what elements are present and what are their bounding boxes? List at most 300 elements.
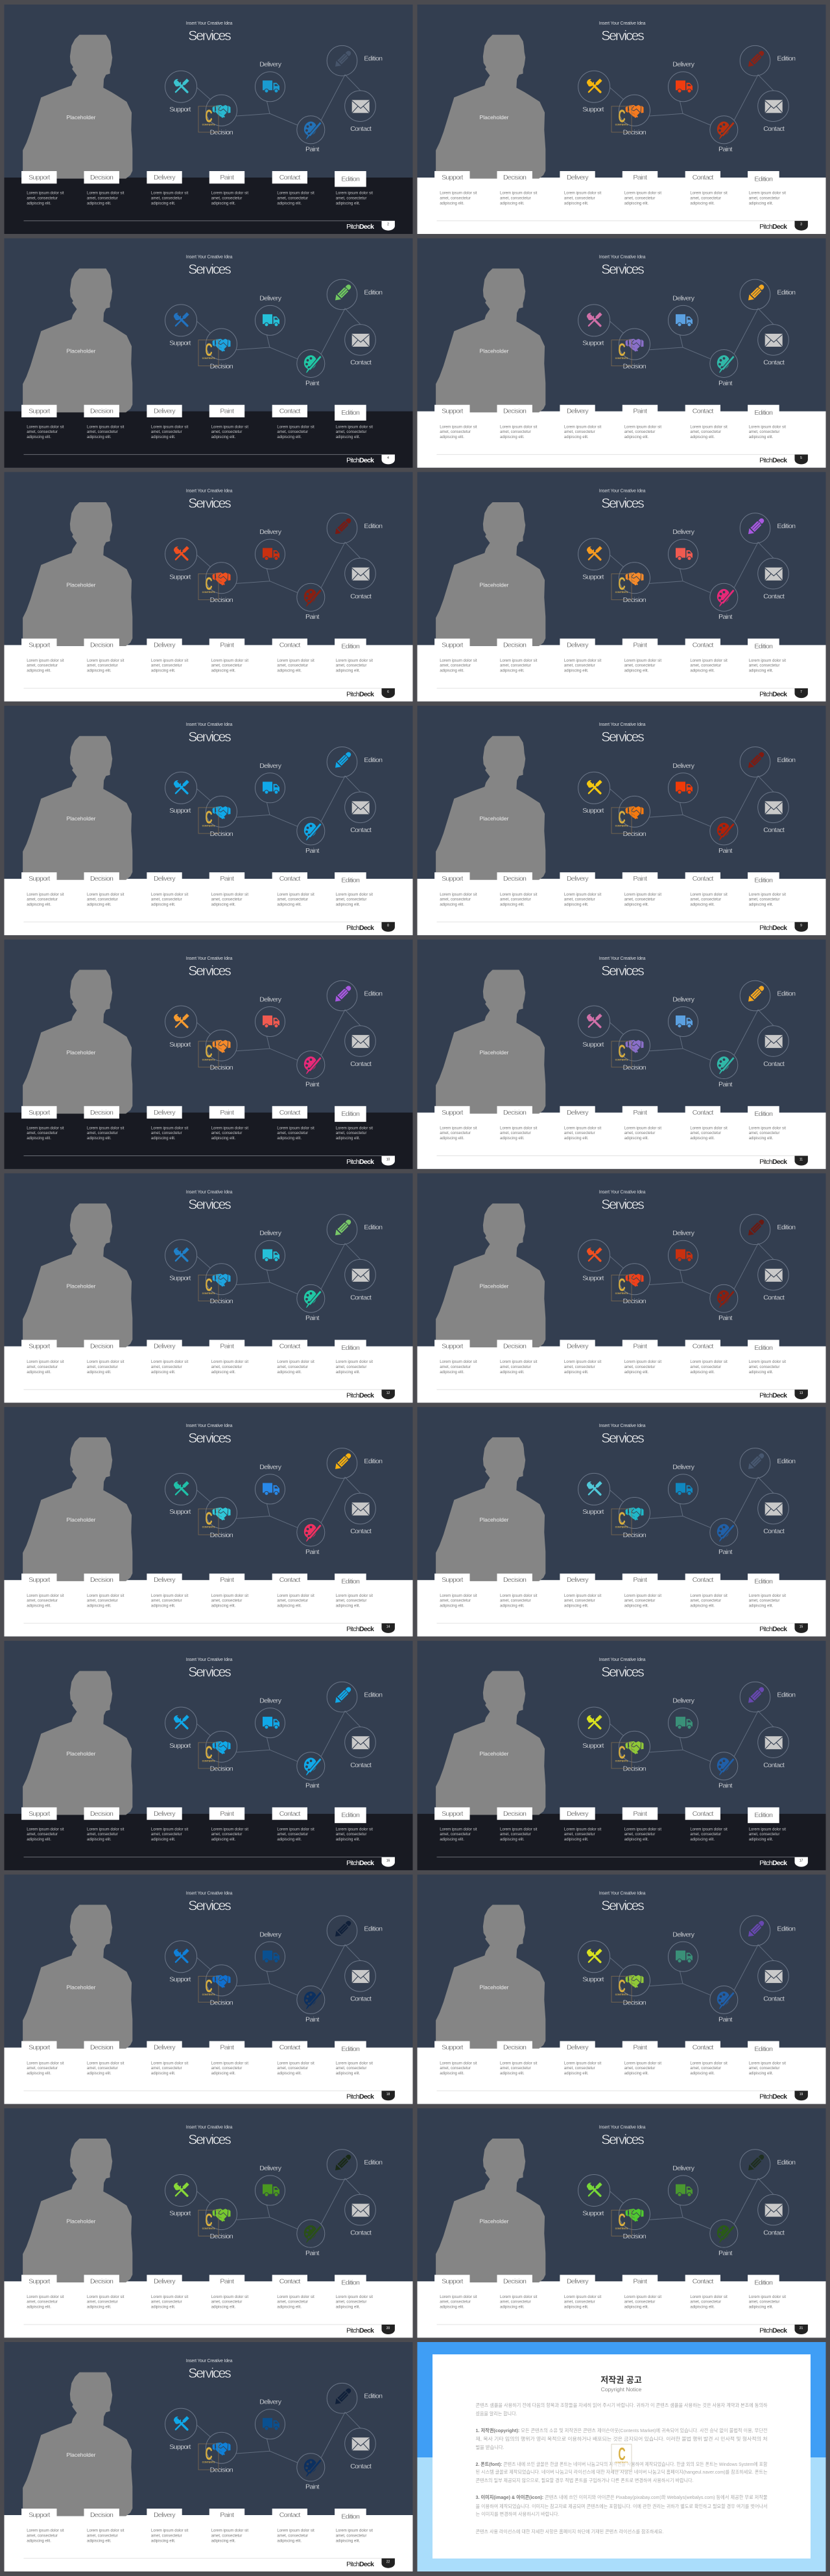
- logo badge: C: [205, 2444, 213, 2464]
- logo badge: C: [618, 1976, 626, 1996]
- node: Paint: Paint: [305, 2249, 320, 2257]
- descriptions: Lorem ipsum dolor sit: [749, 2295, 786, 2299]
- title: [186, 2359, 233, 2381]
- descriptions: amet, consectetur: [500, 2301, 531, 2304]
- node: Contact: Contact: [763, 1995, 785, 2003]
- descriptions: adipiscing elit.: [211, 435, 236, 439]
- logo badge: C: [205, 106, 213, 126]
- logo badge: [198, 807, 219, 833]
- descriptions: adipiscing elit.: [440, 2072, 464, 2076]
- descriptions: adipiscing elit.: [87, 2539, 112, 2543]
- descriptions: adipiscing elit.: [690, 1137, 715, 1141]
- descriptions: amet, consectetur: [500, 1131, 531, 1135]
- title: [599, 723, 646, 745]
- descriptions: Lorem ipsum dolor sit: [564, 192, 602, 196]
- node: Edition: [335, 53, 383, 67]
- descriptions: adipiscing elit.: [749, 2072, 774, 2076]
- descriptions: amet, consectetur: [440, 1131, 471, 1135]
- descriptions: amet, consectetur: [564, 898, 595, 901]
- descriptions: amet, consectetur: [277, 430, 308, 434]
- footer brand: 12: [386, 1391, 390, 1395]
- tabs: Edition: [754, 643, 773, 651]
- node: Support: Support: [169, 2209, 191, 2217]
- footer brand: PitchDeck: [759, 1158, 787, 1166]
- descriptions: Lorem ipsum dolor sit: [500, 425, 538, 429]
- descriptions: amet, consectetur: [211, 1131, 242, 1135]
- title: [186, 723, 233, 745]
- tabs: Edition: [754, 2045, 773, 2053]
- node: Contact: Contact: [763, 1761, 785, 1769]
- descriptions: [440, 659, 786, 673]
- node: Paint: [715, 587, 734, 621]
- descriptions: adipiscing elit.: [440, 2306, 464, 2310]
- node: Delivery: [259, 1931, 282, 1963]
- tabs: Contact: [693, 2044, 713, 2052]
- tabs: Delivery: [567, 1810, 589, 1818]
- descriptions: amet, consectetur: [211, 2067, 242, 2071]
- tabs: Paint: [220, 408, 234, 415]
- title: Insert Your Creative Idea: [599, 255, 646, 260]
- node: Delivery: Delivery: [672, 1697, 695, 1705]
- descriptions: adipiscing elit.: [749, 1604, 774, 1608]
- descriptions: Lorem ipsum dolor sit: [564, 893, 602, 897]
- tabs: Support: [442, 408, 463, 415]
- logo badge: CONTENTS: [615, 1058, 628, 1061]
- descriptions: Lorem ipsum dolor sit: [151, 659, 189, 663]
- title: Services: [601, 496, 644, 511]
- node: Delivery: [259, 528, 282, 561]
- title: Services: [601, 1899, 644, 1914]
- descriptions: Lorem ipsum dolor sit: [440, 1127, 477, 1131]
- node: Delivery: Delivery: [672, 61, 695, 69]
- node: Delivery: [672, 1229, 695, 1262]
- descriptions: amet, consectetur: [27, 1365, 58, 1369]
- descriptions: [27, 1594, 373, 1608]
- descriptions: amet, consectetur: [27, 898, 58, 901]
- node: Edition: [748, 286, 796, 300]
- placeholder label: Placeholder: [67, 1283, 96, 1290]
- node: Contact: Contact: [350, 1995, 372, 2003]
- descriptions: Lorem ipsum dolor sit: [624, 1127, 661, 1131]
- node: Edition: Edition: [364, 522, 383, 530]
- node: Edition: [335, 988, 383, 1002]
- tabs: Decision: [90, 2044, 113, 2052]
- descriptions: amet, consectetur: [211, 664, 242, 668]
- descriptions: Lorem ipsum dolor sit: [690, 1127, 728, 1131]
- descriptions: Lorem ipsum dolor sit: [336, 425, 373, 429]
- descriptions: Lorem ipsum dolor sit: [87, 893, 124, 897]
- descriptions: Lorem ipsum dolor sit: [87, 1828, 124, 1832]
- descriptions: Lorem ipsum dolor sit: [27, 1360, 64, 1364]
- node: Decision: [210, 1975, 233, 2006]
- node: Decision: [623, 1975, 646, 2006]
- descriptions: amet, consectetur: [87, 196, 118, 200]
- node: Edition: [335, 1923, 383, 1936]
- tabs: Paint: [634, 1109, 647, 1117]
- tabs: Contact: [279, 2277, 300, 2285]
- descriptions: amet, consectetur: [690, 1365, 721, 1369]
- tabs: Support: [442, 875, 463, 883]
- tabs: Delivery: [154, 174, 176, 181]
- footer brand: 14: [386, 1625, 390, 1629]
- node: Delivery: Delivery: [672, 1931, 695, 1938]
- tabs: [29, 408, 360, 417]
- descriptions: Lorem ipsum dolor sit: [27, 192, 64, 196]
- tabs: Edition: [341, 1110, 360, 1118]
- tabs: Decision: [503, 1810, 527, 1818]
- descriptions: amet, consectetur: [624, 1365, 655, 1369]
- descriptions: adipiscing elit.: [27, 202, 51, 205]
- descriptions: amet, consectetur: [87, 1131, 118, 1135]
- descriptions: Lorem ipsum dolor sit: [749, 893, 786, 897]
- descriptions: adipiscing elit.: [277, 1838, 302, 1842]
- descriptions: amet, consectetur: [27, 1833, 58, 1837]
- tabs: Paint: [634, 1343, 647, 1351]
- node: Decision: [210, 339, 233, 370]
- descriptions: adipiscing elit.: [87, 669, 112, 673]
- tabs: Delivery: [567, 641, 589, 649]
- descriptions: amet, consectetur: [336, 430, 366, 434]
- title: [186, 957, 233, 979]
- descriptions: amet, consectetur: [500, 1599, 531, 1603]
- node: Decision: Decision: [210, 129, 233, 137]
- node: Contact: Contact: [350, 359, 372, 367]
- node: Decision: Decision: [623, 129, 646, 137]
- logo badge: CONTENTS: [202, 123, 215, 126]
- descriptions: amet, consectetur: [624, 664, 655, 668]
- copyright text: 3. 이미지(image) & 아이콘(icon): 콘텐츠 내에 쓰인 이미지와 아이콘은 Pixabay(pixabay.com)와 Webalys(webalys.com) 등에서 제공한 무료 저작물: [476, 2494, 768, 2500]
- descriptions: amet, consectetur: [87, 664, 118, 668]
- node: Decision: [623, 105, 646, 137]
- descriptions: amet, consectetur: [440, 2301, 471, 2304]
- descriptions: Lorem ipsum dolor sit: [624, 893, 661, 897]
- placeholder label: Placeholder: [67, 114, 96, 121]
- descriptions: amet, consectetur: [690, 1833, 721, 1837]
- footer brand: 22: [386, 2560, 390, 2564]
- descriptions: adipiscing elit.: [336, 202, 361, 205]
- descriptions: [440, 1828, 786, 1842]
- descriptions: adipiscing elit.: [440, 435, 464, 439]
- logo badge: CONTENTS: [615, 1526, 628, 1529]
- logo badge: C: [618, 807, 626, 828]
- descriptions: Lorem ipsum dolor sit: [211, 659, 248, 663]
- tabs: Support: [442, 174, 463, 181]
- tabs: [29, 174, 360, 183]
- tabs: Support: [29, 408, 50, 415]
- placeholder label: Placeholder: [480, 1750, 509, 1757]
- node: Edition: [335, 2157, 383, 2170]
- node: Contact: Contact: [350, 1060, 372, 1068]
- node: Contact: Contact: [763, 125, 785, 133]
- tabs: Paint: [634, 1810, 647, 1818]
- descriptions: adipiscing elit.: [277, 2072, 302, 2076]
- descriptions: amet, consectetur: [336, 1833, 366, 1837]
- node: Contact: Contact: [763, 1060, 785, 1068]
- descriptions: adipiscing elit.: [624, 202, 649, 205]
- node: Decision: [623, 339, 646, 370]
- descriptions: Lorem ipsum dolor sit: [27, 425, 64, 429]
- node: Decision: Decision: [623, 596, 646, 604]
- copyright text: 1. 저작권(copyright): 모든 콘텐츠의 소유 및 저작권은 콘텐츠 제이슨아웃(Contents Market)에 귀속되어 있습니다. 사전 승낙 없이 불법적 이용, 무단전: [476, 2428, 768, 2433]
- title: [186, 1190, 233, 1212]
- descriptions: adipiscing elit.: [87, 202, 112, 205]
- node: Contact: Contact: [350, 826, 372, 834]
- descriptions: Lorem ipsum dolor sit: [624, 2295, 661, 2299]
- descriptions: amet, consectetur: [151, 196, 182, 200]
- footer brand: PitchDeck: [346, 2093, 374, 2101]
- copyright text: 벌을 받습니다.: [476, 2444, 504, 2450]
- title: [599, 1424, 646, 1446]
- tabs: Decision: [90, 641, 113, 649]
- tabs: Delivery: [567, 1109, 589, 1117]
- descriptions: [440, 893, 786, 907]
- node: Support: Support: [169, 1742, 191, 1750]
- logo badge: [198, 574, 219, 599]
- footer brand: 18: [386, 2093, 390, 2096]
- footer brand: 19: [800, 2093, 803, 2096]
- panel: slide 12: [4, 1173, 412, 1402]
- descriptions: amet, consectetur: [690, 430, 721, 434]
- logo badge: C: [618, 1743, 626, 1763]
- descriptions: amet, consectetur: [440, 898, 471, 901]
- node: Paint: [302, 2457, 320, 2491]
- node: Support: Support: [582, 1742, 604, 1750]
- descriptions: adipiscing elit.: [151, 903, 176, 907]
- copyright text: 콘텐츠의 일부 제공되지 않으므로, 필요할 경우 적법 폰트를 구입하거나 다른 폰트로 변경하여 사용하시기 바랍니다.: [476, 2477, 694, 2483]
- logo badge: CONTENTS: [202, 1993, 215, 1996]
- tabs: Edition: [341, 409, 360, 417]
- footer brand: [346, 1859, 390, 1867]
- node: Paint: [302, 353, 320, 387]
- panel: slide 16: [4, 1641, 412, 1870]
- descriptions: amet, consectetur: [749, 1131, 779, 1135]
- descriptions: amet, consectetur: [277, 1131, 308, 1135]
- node: Edition: Edition: [364, 990, 383, 998]
- logo badge: C: [205, 2210, 213, 2230]
- node: Delivery: [259, 762, 282, 794]
- descriptions: amet, consectetur: [500, 2067, 531, 2071]
- descriptions: adipiscing elit.: [87, 1137, 112, 1141]
- logo badge: [198, 340, 219, 366]
- node: Paint: Paint: [305, 613, 320, 621]
- copyright text: 을 이용하여 제작되었습니다. 이미지는 참고자료 제공되며 콘텐츠에는 포함됩니다. 이에 관한 권리는 귀하가 별도로 확인하고 필요할 경우 여기를 벗어나서: [476, 2503, 768, 2509]
- tabs: Delivery: [154, 1343, 176, 1351]
- node: Support: [169, 1949, 191, 1984]
- title: Insert Your Creative Idea: [186, 1190, 233, 1195]
- footer brand: PitchDeck: [346, 1859, 374, 1867]
- node: Delivery: Delivery: [259, 1463, 282, 1471]
- descriptions: Lorem ipsum dolor sit: [564, 2061, 602, 2065]
- panel: slide 4: [4, 238, 412, 468]
- descriptions: amet, consectetur: [211, 1599, 242, 1603]
- descriptions: amet, consectetur: [277, 664, 308, 668]
- descriptions: Lorem ipsum dolor sit: [211, 2295, 248, 2299]
- descriptions: [440, 2061, 786, 2076]
- descriptions: adipiscing elit.: [87, 2072, 112, 2076]
- panel: slide 9: [418, 706, 826, 935]
- node: Decision: Decision: [623, 2233, 646, 2240]
- copyright text: 셨음을 알리는 합니다.: [476, 2411, 517, 2417]
- node: Paint: Paint: [305, 847, 320, 855]
- placeholder label: Placeholder: [67, 1984, 96, 1991]
- node: Decision: [623, 806, 646, 838]
- logo badge: CONTENTS: [615, 591, 628, 594]
- panel: slide 3: [418, 5, 826, 234]
- descriptions: [440, 2295, 786, 2310]
- descriptions: adipiscing elit.: [277, 2539, 302, 2543]
- title: [186, 21, 233, 43]
- tabs: Edition: [341, 1577, 360, 1585]
- descriptions: amet, consectetur: [564, 1833, 595, 1837]
- descriptions: amet, consectetur: [27, 2301, 58, 2304]
- footer brand: PitchDeck: [346, 457, 374, 465]
- node: Decision: Decision: [210, 1765, 233, 1773]
- logo badge: CONTENTS: [615, 1993, 628, 1996]
- panel: slide 8: [4, 706, 412, 935]
- node: Decision: Decision: [210, 362, 233, 370]
- footer brand: [759, 1625, 803, 1633]
- descriptions: amet, consectetur: [27, 430, 58, 434]
- footer brand: [759, 1391, 803, 1400]
- tabs: Paint: [220, 2277, 234, 2285]
- tabs: Paint: [220, 1109, 234, 1117]
- node: Support: Support: [169, 1274, 191, 1282]
- tabs: Paint: [634, 2277, 647, 2285]
- tabs: Edition: [341, 1344, 360, 1352]
- descriptions: adipiscing elit.: [500, 202, 525, 205]
- descriptions: adipiscing elit.: [624, 903, 649, 907]
- descriptions: amet, consectetur: [500, 430, 531, 434]
- title: [186, 1424, 233, 1446]
- descriptions: amet, consectetur: [749, 430, 779, 434]
- descriptions: adipiscing elit.: [440, 1371, 464, 1375]
- tabs: Contact: [693, 1343, 713, 1351]
- logo badge: C: [205, 1976, 213, 1996]
- logo badge: [611, 1509, 632, 1535]
- descriptions: adipiscing elit.: [336, 1137, 361, 1141]
- tabs: Decision: [503, 641, 527, 649]
- node: Paint: [715, 1522, 734, 1556]
- tabs: Support: [29, 2511, 50, 2519]
- tabs: Decision: [90, 2511, 113, 2519]
- descriptions: adipiscing elit.: [277, 202, 302, 205]
- descriptions: Lorem ipsum dolor sit: [500, 659, 538, 663]
- descriptions: amet, consectetur: [336, 2534, 366, 2538]
- logo badge: C: [205, 340, 213, 360]
- node: Edition: Edition: [777, 55, 796, 63]
- node: Paint: Paint: [305, 1548, 320, 1556]
- node: Support: [582, 1949, 604, 1984]
- placeholder label: Placeholder: [480, 1283, 509, 1290]
- node: Delivery: Delivery: [672, 996, 695, 1004]
- node: Support: [169, 2183, 191, 2217]
- node: Paint: Paint: [305, 146, 320, 154]
- node: Decision: Decision: [210, 1064, 233, 1072]
- footer brand: PitchDeck: [346, 1392, 374, 1400]
- descriptions: Lorem ipsum dolor sit: [151, 1360, 189, 1364]
- footer brand: PitchDeck: [759, 1625, 787, 1633]
- descriptions: amet, consectetur: [336, 1131, 366, 1135]
- title: Insert Your Creative Idea: [186, 1892, 233, 1896]
- descriptions: amet, consectetur: [277, 2067, 308, 2071]
- descriptions: amet, consectetur: [87, 2534, 118, 2538]
- footer brand: PitchDeck: [759, 2093, 787, 2101]
- node: Contact: Contact: [763, 1294, 785, 1301]
- descriptions: [440, 192, 786, 205]
- node: Paint: [715, 1990, 734, 2023]
- copyright heading: 저작권 공고: [600, 2375, 642, 2385]
- node: Paint: [302, 821, 320, 855]
- node: Edition: [335, 2391, 383, 2404]
- footer brand: [759, 223, 802, 231]
- footer brand: PitchDeck: [346, 223, 374, 231]
- node: Edition: [335, 754, 383, 768]
- tabs: Contact: [693, 1576, 713, 1584]
- descriptions: adipiscing elit.: [624, 2072, 649, 2076]
- node: Paint: Paint: [718, 613, 733, 621]
- descriptions: adipiscing elit.: [336, 1838, 361, 1842]
- copyright heading: Copyright Notice: [601, 2386, 642, 2393]
- node: Support: Support: [169, 1976, 191, 1984]
- descriptions: Lorem ipsum dolor sit: [564, 1360, 602, 1364]
- title: Insert Your Creative Idea: [186, 2125, 233, 2129]
- descriptions: amet, consectetur: [564, 1131, 595, 1135]
- tabs: Edition: [341, 1811, 360, 1819]
- descriptions: Lorem ipsum dolor sit: [211, 1828, 248, 1832]
- footer brand: [346, 2327, 390, 2334]
- node: Edition: Edition: [777, 288, 796, 296]
- descriptions: adipiscing elit.: [690, 903, 715, 907]
- node: Edition: [748, 2157, 796, 2170]
- descriptions: [27, 893, 373, 907]
- logo badge: CONTENTS: [202, 1058, 215, 1061]
- node: Delivery: [672, 2164, 695, 2197]
- descriptions: Lorem ipsum dolor sit: [440, 1594, 477, 1598]
- placeholder label: Placeholder: [480, 114, 509, 121]
- title: Services: [188, 1899, 231, 1914]
- tabs: Decision: [90, 1576, 113, 1584]
- descriptions: adipiscing elit.: [500, 1604, 525, 1608]
- descriptions: amet, consectetur: [564, 1365, 595, 1369]
- descriptions: amet, consectetur: [624, 1131, 655, 1135]
- tabs: [442, 1810, 773, 1819]
- descriptions: adipiscing elit.: [749, 669, 774, 673]
- title: Services: [188, 29, 231, 43]
- node: Delivery: [672, 61, 695, 93]
- descriptions: adipiscing elit.: [27, 1838, 51, 1842]
- node: Delivery: Delivery: [259, 996, 282, 1004]
- descriptions: Lorem ipsum dolor sit: [27, 1127, 64, 1131]
- node: Decision: [210, 1507, 233, 1539]
- tabs: Delivery: [154, 2277, 176, 2285]
- descriptions: amet, consectetur: [690, 1131, 721, 1135]
- descriptions: amet, consectetur: [690, 196, 721, 200]
- footer brand: PitchDeck: [759, 924, 787, 932]
- descriptions: Lorem ipsum dolor sit: [440, 2061, 477, 2065]
- node: Delivery: [259, 294, 282, 327]
- descriptions: Lorem ipsum dolor sit: [440, 1360, 477, 1364]
- node: Decision: [623, 1274, 646, 1305]
- descriptions: adipiscing elit.: [27, 2306, 51, 2310]
- descriptions: [27, 2529, 373, 2543]
- tabs: Support: [29, 875, 50, 883]
- node: Edition: [748, 520, 796, 534]
- logo badge: C: [618, 2444, 626, 2464]
- logo badge: CONTENTS: [202, 1292, 215, 1295]
- descriptions: Lorem ipsum dolor sit: [749, 425, 786, 429]
- node: Paint: [715, 2223, 734, 2257]
- tabs: Edition: [341, 2279, 360, 2287]
